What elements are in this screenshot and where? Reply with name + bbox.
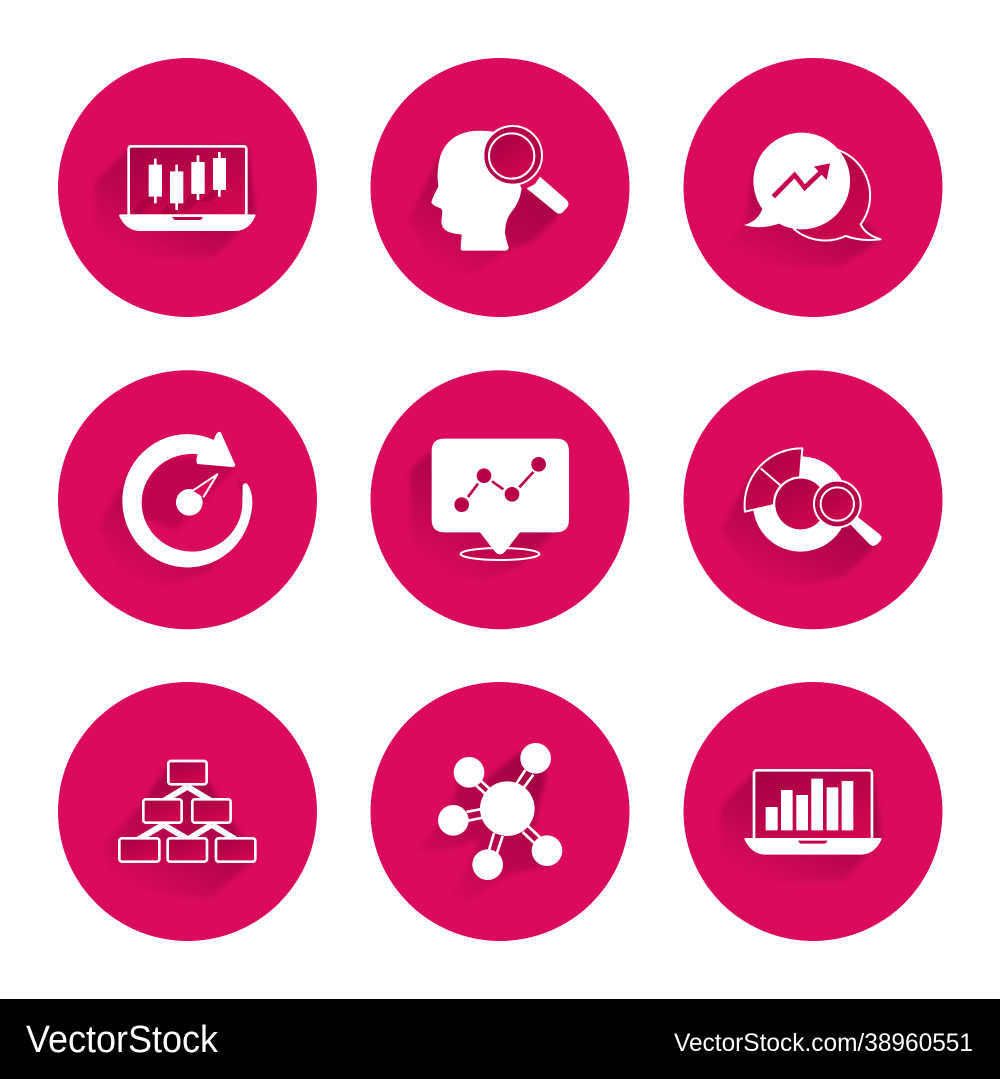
panel: laptop with bar chart: [684, 682, 942, 941]
icon: map pointer chart: [410, 439, 569, 580]
icon: network nodes: [417, 743, 562, 902]
panel: speech bubbles with rising arrow: [684, 58, 942, 317]
panel: donut chart with magnifying glass: [684, 370, 942, 629]
panel: laptop with candlestick chart: [58, 58, 317, 317]
icon: chat trend: [721, 133, 881, 268]
panel: circular arrow with dial: [58, 370, 317, 629]
panel: hierarchy diagram: [58, 682, 317, 941]
icon: pie chart search: [721, 448, 882, 587]
icon: laptop bars: [721, 769, 882, 884]
panel: molecule network: [370, 682, 630, 941]
footer brand name: VectorStock: [26, 1019, 219, 1061]
icon: speedometer refresh: [98, 432, 252, 587]
icon: laptop candlestick: [95, 145, 256, 260]
panel: location bubble with line chart: [370, 370, 630, 629]
icon: head search: [408, 126, 568, 277]
footer image id: VectorStock.com/38960551: [674, 1029, 973, 1057]
icon: org chart: [103, 761, 255, 899]
footer bar: [0, 999, 1000, 1079]
panel: head with magnifying glass: [370, 58, 630, 317]
